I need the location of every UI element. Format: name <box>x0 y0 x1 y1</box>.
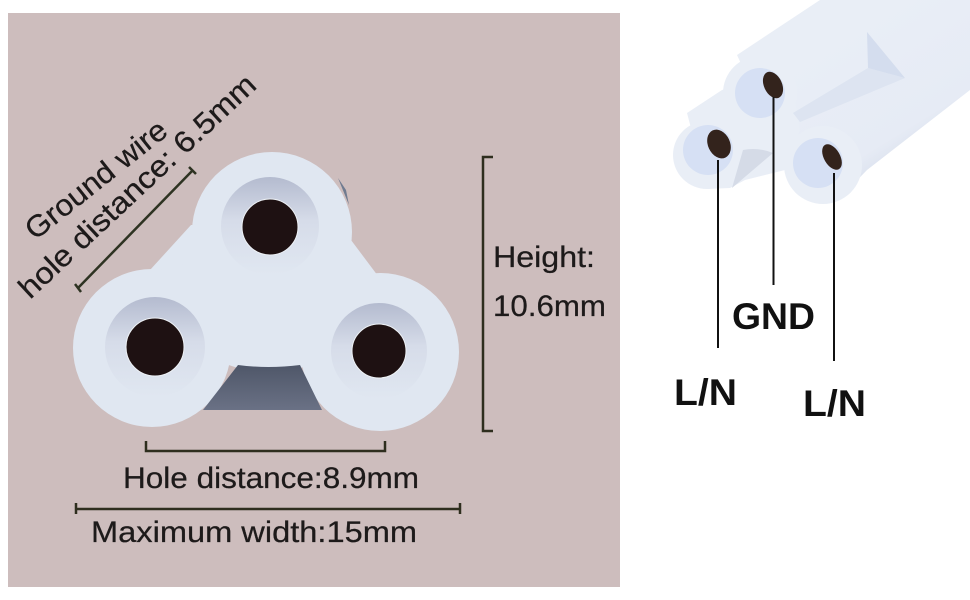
groove facet <box>867 32 905 78</box>
panel: connector dimensions <box>8 13 620 587</box>
dimension: maximum width: Maximum width:15mm <box>91 516 417 549</box>
dimension: height: Height: <box>493 241 595 274</box>
wire holes <box>703 69 846 173</box>
dimension: hole distance <box>123 441 419 495</box>
label: GND: GND <box>732 296 815 337</box>
connector end view <box>73 152 459 431</box>
lower notch <box>732 149 773 188</box>
notch <box>203 365 322 410</box>
dimension: ground wire hole distance: Ground wire <box>19 114 174 246</box>
cable body <box>737 0 970 201</box>
panel: wiring photo <box>673 0 970 424</box>
dimension: height: 10.6mm <box>493 290 606 323</box>
label: L/N left: L/N <box>674 372 737 413</box>
dimension: maximum width <box>76 503 460 549</box>
socket ends <box>673 56 862 204</box>
label: L/N right: L/N <box>803 383 866 424</box>
leader lines <box>718 97 834 361</box>
dimension: height <box>483 157 606 431</box>
dimension: ground wire hole distance: hole distance: 6.5mm <box>12 68 263 305</box>
holes <box>126 199 406 378</box>
cable groove <box>793 68 905 122</box>
dimension: hole distance: Hole distance:8.9mm <box>123 462 419 495</box>
